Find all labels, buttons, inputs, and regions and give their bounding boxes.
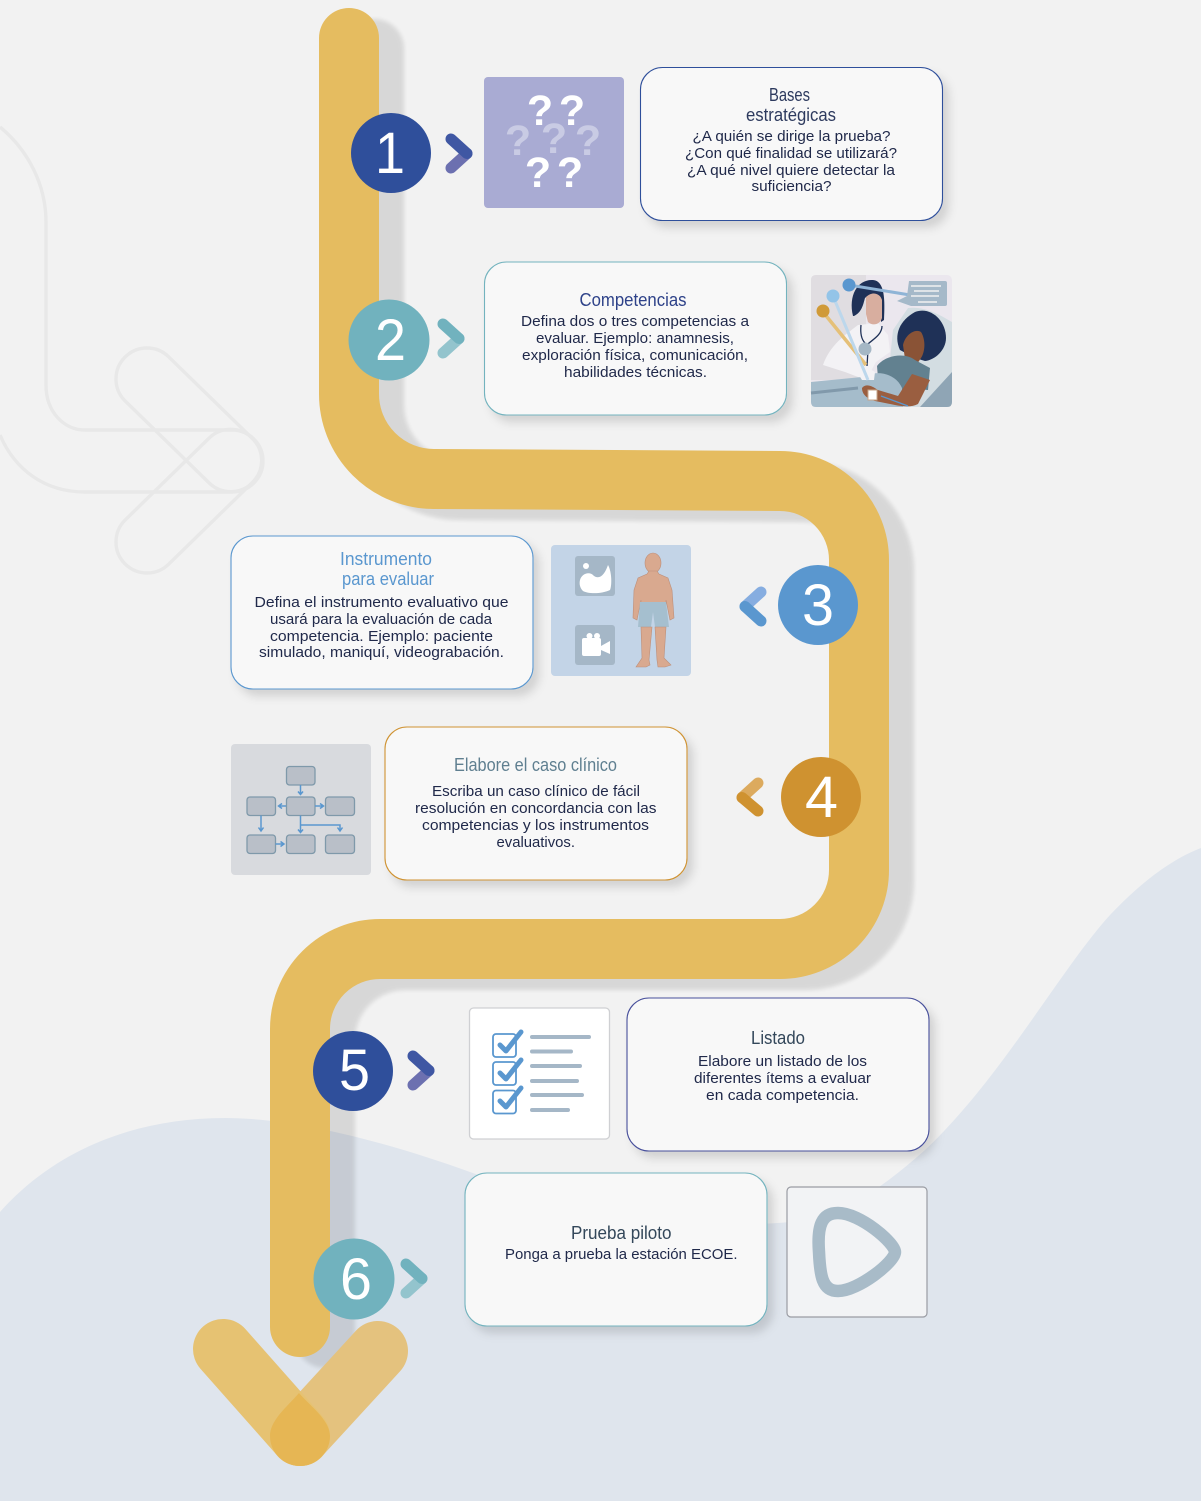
- heading: prueba piloto: Prueba piloto: [571, 1223, 672, 1243]
- text: instrumento: usará para la evaluación de cada: [270, 611, 493, 628]
- step 6 chevron: [406, 1264, 422, 1293]
- step 1 image: question marks: ?: [505, 117, 531, 165]
- text: prueba piloto: Ponga a prueba la estación ECOE.: [505, 1246, 738, 1263]
- step 4 chevron: [742, 783, 758, 811]
- step 1 image: question marks: ?: [559, 87, 585, 135]
- step 1 chevron: [451, 139, 467, 168]
- heading: listado: Listado: [751, 1028, 805, 1048]
- step 4 number: 4: [805, 765, 838, 830]
- text: caso clínico: resolución en concordancia con las: [415, 800, 656, 817]
- text: bases estratégicas: suficiencia?: [752, 178, 832, 195]
- step 6 number: [314, 1238, 394, 1320]
- text: listado: diferentes ítems a evaluar: [694, 1070, 871, 1087]
- text: bases estratégicas: [685, 128, 897, 195]
- road shadow: [325, 49, 884, 1338]
- heading: bases estratégicas: Bases: [769, 85, 810, 105]
- text: caso clínico: evaluativos.: [496, 834, 575, 851]
- text: bases estratégicas: ¿Con qué finalidad se utilizará?: [685, 145, 897, 162]
- text: competencias: [521, 313, 750, 381]
- text: caso clínico: competencias y los instrumentos: [422, 817, 649, 834]
- step 5 chevron: [413, 1056, 429, 1085]
- step 2 image: doctor and patient: [811, 275, 952, 407]
- heading: competencias: Competencias: [580, 290, 686, 310]
- text: instrumento: [254, 594, 508, 661]
- step 5 image: checklist: [470, 1008, 610, 1139]
- step 4 image: flowchart: [231, 744, 371, 875]
- step 1 image: question marks: ?: [527, 87, 553, 135]
- step 3 chevron: [745, 592, 761, 621]
- text: instrumento: simulado, maniquí, videograbación.: [259, 644, 504, 661]
- heading: instrumento para evaluar: Instrumento: [340, 549, 432, 569]
- panel: competencias: [484, 262, 786, 415]
- step 2 number: [348, 300, 430, 380]
- text: listado: [694, 1053, 871, 1104]
- step 1 image: question marks: ?: [525, 149, 551, 197]
- step 3 number: [778, 565, 858, 645]
- text: listado: Elabore un listado de los: [698, 1053, 867, 1070]
- text: listado: en cada competencia.: [706, 1087, 859, 1104]
- text: competencias: exploración física, comunicación,: [522, 347, 748, 364]
- background arrow outline: [0, 127, 275, 586]
- text: competencias: Defina dos o tres competencias a: [521, 313, 750, 330]
- heading: bases estratégicas: [746, 85, 836, 125]
- text: caso clínico: [415, 783, 656, 851]
- step 1 image: question marks: ?: [541, 115, 567, 163]
- step 1 number: [351, 113, 431, 193]
- background hill: [0, 848, 1201, 1501]
- step 5 number: [313, 1031, 393, 1111]
- step 1 image: question marks: ?: [575, 117, 601, 165]
- panel: bases estratégicas: [640, 68, 942, 220]
- text: instrumento: Defina el instrumento evaluativo que: [254, 594, 508, 611]
- step 3 number: 3: [802, 573, 834, 638]
- step 6 image: play icon: [787, 1187, 927, 1317]
- text: caso clínico: Escriba un caso clínico de fácil: [432, 783, 640, 800]
- text: instrumento: competencia. Ejemplo: paciente: [270, 628, 493, 645]
- step 3 image: mannequin: [551, 545, 691, 676]
- step 2 chevron: [443, 324, 459, 353]
- panel: caso clínico: [385, 727, 687, 880]
- step 1 image: question marks: ?: [557, 149, 583, 197]
- step 4 number: [781, 757, 861, 837]
- text: bases estratégicas: ¿A qué nivel quiere detectar la: [687, 162, 896, 179]
- step 6 number: 6: [340, 1247, 372, 1312]
- step 1 image: question marks: [484, 77, 624, 208]
- heading: caso clínico: Elabore el caso clínico: [454, 755, 617, 775]
- end arrow: [223, 1349, 378, 1466]
- panel: prueba piloto: [465, 1173, 767, 1326]
- road path: [300, 38, 859, 1327]
- panel: instrumento para evaluar: [231, 536, 533, 689]
- panel: listado: [627, 998, 929, 1151]
- heading: bases estratégicas: estratégicas: [746, 105, 836, 125]
- text: competencias: habilidades técnicas.: [564, 364, 707, 381]
- text: bases estratégicas: ¿A quién se dirige la prueba?: [692, 128, 890, 145]
- step 1 number: 1: [375, 121, 405, 186]
- step 5 number: 5: [339, 1038, 370, 1103]
- heading: instrumento para evaluar: para evaluar: [342, 569, 434, 589]
- heading: instrumento para evaluar: [340, 549, 434, 589]
- step 2 number: 2: [375, 308, 406, 373]
- text: competencias: evaluar. Ejemplo: anamnesis,: [536, 330, 734, 347]
